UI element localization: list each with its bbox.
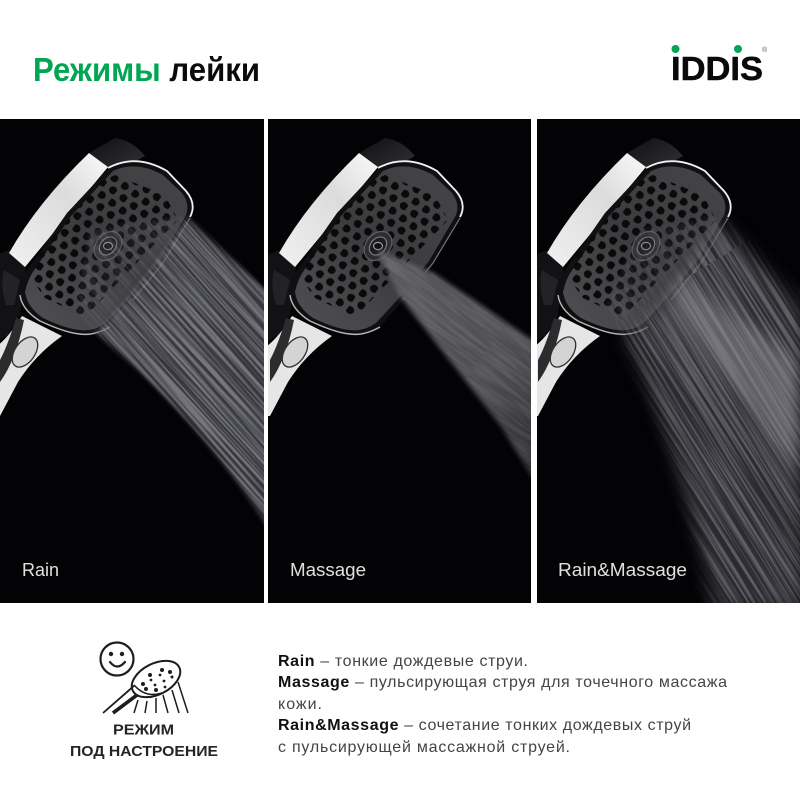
combined water stream <box>606 214 800 603</box>
logo: IDDIS: IDDIS <box>671 50 763 87</box>
label: Rain: Rain <box>22 559 59 580</box>
massage jet <box>376 249 531 479</box>
icon: smiley <box>100 642 134 676</box>
icon caption <box>70 722 218 760</box>
description text: Rain&Massage – сочетание тонких дождевых струй <box>278 717 691 734</box>
label: Rain&Massage: Rain&Massage <box>558 559 687 580</box>
icon caption: РЕЖИМ <box>113 722 174 738</box>
panel: Rain&Massage <box>535 119 800 603</box>
title: Режимы лейки <box>33 51 260 88</box>
icon: smiley and shower head <box>100 642 188 713</box>
panel: Rain <box>0 119 264 603</box>
shower head, combined mode <box>535 138 731 416</box>
icon: shower head <box>103 653 188 713</box>
panel: Massage <box>267 119 531 603</box>
description text: с пульсирующей массажной струей. <box>278 739 570 756</box>
label: Massage: Massage <box>290 559 366 580</box>
icon caption: ПОД НАСТРОЕНИЕ <box>70 743 218 760</box>
description text <box>278 653 727 756</box>
rain water stream <box>76 216 264 526</box>
shower head, rain mode <box>0 138 193 416</box>
shower head, massage mode <box>267 138 463 416</box>
description text: Rain – тонкие дождевые струи. <box>278 653 528 670</box>
logo: IDDIS: ® <box>762 46 768 54</box>
description text: кожи. <box>278 696 322 713</box>
description text: Massage – пульсирующая струя для точечного массажа <box>278 674 727 691</box>
